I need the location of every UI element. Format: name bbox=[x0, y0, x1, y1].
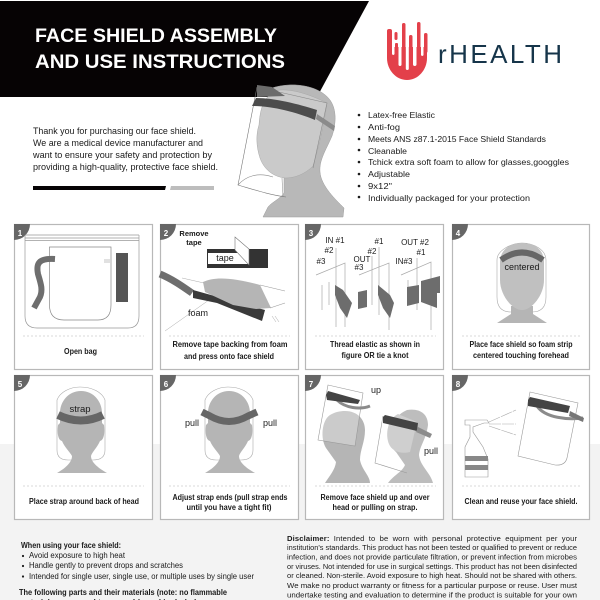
caption: and press onto face shield bbox=[184, 352, 274, 361]
step number 4 bbox=[452, 224, 468, 240]
disclaimer: institution's standards. This product has not been tested or qualified to prevent or reduce bbox=[287, 543, 577, 552]
disclaimer bbox=[287, 534, 578, 600]
caption: Remove tape backing from foam bbox=[172, 340, 288, 349]
usage notes: The following parts and their materials (note: no flammable bbox=[19, 587, 227, 597]
icon: head front with shield bbox=[497, 243, 547, 323]
label: remove tape: Remove bbox=[179, 229, 209, 238]
icon: back of head with strap bbox=[57, 387, 107, 473]
step number 2: 2 bbox=[164, 229, 169, 238]
icon: back of head with strap pulled bbox=[185, 387, 277, 473]
step number 5: 5 bbox=[18, 380, 23, 389]
label: pull left: pull bbox=[185, 418, 199, 428]
disclaimer: We make no product warranty or fitness for a particular purpose or reuse. User must bbox=[287, 581, 578, 590]
step number 1: 1 bbox=[18, 229, 23, 238]
caption: centered touching forehead bbox=[473, 351, 569, 360]
figures: threading diagrams: #1 bbox=[417, 248, 426, 257]
figures: threading diagrams bbox=[316, 236, 440, 330]
intro text: want to ensure your safety and protection by bbox=[32, 150, 213, 160]
panel: step 2 remove tape bbox=[160, 224, 298, 370]
icon: bag with shield and foam bbox=[25, 235, 139, 328]
usage notes: Handle gently to prevent drops and scratches bbox=[29, 560, 183, 570]
caption: Place face shield so foam strip bbox=[470, 340, 573, 349]
feature list: Individually packaged for your protection bbox=[368, 193, 530, 203]
icon: tape strip bbox=[207, 237, 268, 268]
caption bbox=[330, 340, 420, 360]
label: remove tape bbox=[179, 229, 209, 247]
usage notes: Avoid exposure to high heat bbox=[29, 550, 126, 560]
caption: until you have a tight fit) bbox=[186, 503, 272, 512]
usage notes: Intended for single user, single use, or multiple uses by single user bbox=[29, 571, 254, 581]
step number 3: 3 bbox=[309, 229, 314, 238]
caption: head or pulling on strap. bbox=[332, 503, 418, 512]
panel: step 1 open bag bbox=[14, 224, 152, 370]
figures: threading diagrams: IN#3 bbox=[396, 257, 413, 266]
icon: back of head with strap: strap bbox=[69, 404, 91, 415]
icon: hand pressing foam bbox=[160, 274, 285, 331]
panel: step 5 strap bbox=[14, 375, 152, 520]
title: AND USE INSTRUCTIONS bbox=[35, 52, 285, 73]
icon: shield lifted over head bbox=[318, 385, 381, 483]
icon: head front with shield: centered bbox=[504, 262, 540, 272]
panel: step 7 remove bbox=[305, 375, 444, 520]
feature list: Meets ANS z87.1-2015 Face Shield Standards bbox=[368, 134, 546, 144]
icon: shield on head with pull strap bbox=[375, 410, 438, 483]
step number 2 bbox=[160, 224, 176, 240]
disclaimer: infection, and does not provide particulate filtration, or prevent infection from microbes bbox=[287, 552, 577, 562]
figures: threading diagrams: OUT bbox=[354, 255, 371, 264]
step number 3 bbox=[305, 224, 321, 240]
intro text: Thank you for purchasing our face shield. bbox=[33, 126, 196, 136]
usage notes: When using your face shield: bbox=[21, 540, 121, 550]
step number 6: 6 bbox=[164, 380, 169, 389]
caption bbox=[172, 493, 288, 512]
feature list: 9x12" bbox=[368, 181, 392, 191]
disclaimer: Disclaimer: Intended to be worn with personal protective equipment per your bbox=[287, 534, 577, 543]
icon: tape strip: tape bbox=[216, 253, 234, 263]
step number 7: 7 bbox=[309, 380, 314, 389]
label: pull right: pull bbox=[263, 418, 277, 428]
icon: spray bottle bbox=[465, 410, 516, 477]
figures: threading diagrams: #1 bbox=[375, 237, 384, 246]
step number 1 bbox=[14, 224, 30, 240]
figures: threading diagrams: OUT #2 bbox=[401, 238, 429, 247]
disclaimer: or viruses. Not intended for use in surgical settings. This product has not been disinfected bbox=[287, 562, 577, 571]
caption: Place strap around back of head bbox=[29, 497, 139, 506]
label: foam: foam bbox=[188, 308, 208, 318]
step number 6 bbox=[160, 375, 176, 391]
title: FACE SHIELD ASSEMBLY bbox=[35, 26, 277, 47]
intro text: providing a high-quality, protective face shield. bbox=[33, 162, 218, 172]
logo wordmark: rHEALTH bbox=[438, 39, 562, 69]
step number 7 bbox=[305, 375, 321, 391]
caption bbox=[172, 340, 288, 361]
step number 4: 4 bbox=[456, 229, 461, 238]
caption: Remove face shield up and over bbox=[320, 493, 430, 502]
grey lower background bbox=[0, 444, 600, 600]
figures: threading diagrams: #3 bbox=[317, 257, 326, 266]
intro text bbox=[32, 126, 218, 172]
intro text: We are a medical device manufacturer and bbox=[33, 138, 203, 148]
figures: threading diagrams: IN #1 bbox=[325, 236, 345, 245]
panel: step 8 clean bbox=[452, 375, 590, 520]
panel: step 3 thread elastic bbox=[305, 224, 444, 370]
step number 8 bbox=[452, 375, 468, 391]
usage notes bbox=[19, 540, 254, 600]
caption: Thread elastic as shown in bbox=[330, 340, 420, 349]
step number 5 bbox=[14, 375, 30, 391]
caption: figure OR tie a knot bbox=[342, 351, 409, 360]
hero illustration: head with face shield bbox=[238, 85, 344, 217]
caption: Adjust strap ends (pull strap ends bbox=[172, 493, 288, 502]
caption bbox=[470, 340, 573, 360]
feature list bbox=[358, 110, 569, 203]
caption bbox=[320, 493, 430, 512]
caption: Clean and reuse your face shield. bbox=[464, 497, 578, 506]
figures: threading diagrams: #2 bbox=[368, 247, 377, 256]
label: remove tape: tape bbox=[186, 238, 202, 247]
logo: rHEALTH bbox=[387, 22, 562, 80]
icon: face shield bbox=[518, 392, 584, 465]
feature list: Tchick extra soft foam to allow for glasses,googgles bbox=[368, 157, 569, 167]
disclaimer: undertake testing and evaluation to determine if the product is suitable for your own bbox=[287, 590, 577, 600]
feature list: Adjustable bbox=[368, 169, 410, 179]
icon: shield on head with pull strap: pull bbox=[424, 446, 438, 456]
accent bars bbox=[33, 186, 214, 190]
header banner bbox=[0, 1, 369, 97]
icon: shield lifted over head: up bbox=[371, 385, 381, 395]
panel: step 6 pull strap bbox=[160, 375, 298, 520]
feature list: Anti-fog bbox=[368, 122, 400, 132]
feature list: Cleanable bbox=[368, 146, 407, 156]
panel: step 4 centre shield bbox=[452, 224, 590, 370]
figures: threading diagrams: #3 bbox=[355, 263, 364, 272]
step number 8: 8 bbox=[456, 380, 461, 389]
figures: threading diagrams: #2 bbox=[325, 246, 334, 255]
logo hand icon bbox=[387, 22, 428, 80]
title bbox=[35, 26, 285, 73]
disclaimer: or cleaned. Non-sterile. Avoid exposure to high heat. Should not be shared with others. bbox=[287, 571, 577, 580]
feature list: Latex-free Elastic bbox=[368, 110, 436, 120]
caption: Open bag bbox=[64, 347, 97, 356]
